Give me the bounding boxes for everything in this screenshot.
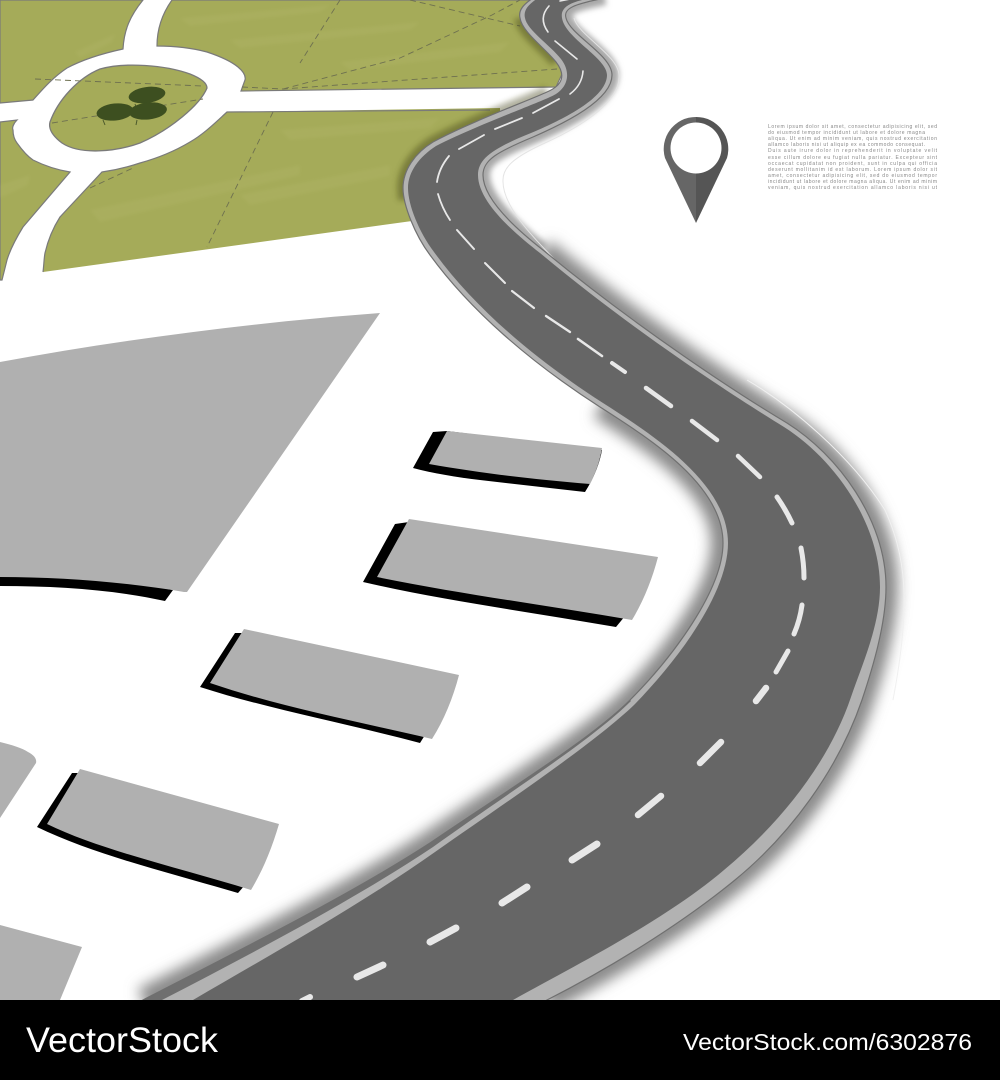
trees — [96, 85, 168, 125]
road centre dashes — [302, 0, 804, 1001]
field: south-west — [0, 120, 70, 280]
icon: map pin — [664, 117, 728, 223]
field texture streaks — [0, 5, 510, 222]
road shadows — [143, 0, 904, 1000]
footer url: VectorStock.com/6302876 — [683, 1029, 972, 1055]
text block: lorem ipsum: Lorem ipsum dolor sit amet, consectetur adipisicing elit, sed — [768, 124, 937, 130]
text block: lorem ipsum — [768, 124, 938, 191]
road dark edge strip — [143, 700, 631, 1000]
road — [110, 0, 886, 1020]
text block: lorem ipsum: veniam, quis nostrud exercitation allamco laboris nisi ut — [768, 185, 938, 191]
card: step 1 — [413, 431, 602, 492]
card: step 4 — [37, 769, 279, 893]
card: left partial — [0, 742, 36, 818]
dashed map lines — [35, 0, 557, 247]
roundabout island — [50, 65, 207, 151]
asphalt — [160, 0, 880, 1018]
text block: lorem ipsum: allamco laboris nisi ut aliquip ex ea commodo consequat. — [768, 142, 925, 148]
card: step 3 — [200, 629, 459, 743]
field: north-west — [0, 0, 143, 103]
text block: lorem ipsum: incididunt ut labore et dolore magna aliqua. Ut enim ad minim — [768, 179, 937, 185]
text block: lorem ipsum: deserunt mollitanim id est laborum. Lorem ipsum dolor sit — [768, 167, 938, 173]
card: large top panel — [0, 313, 380, 601]
text block: lorem ipsum: esse cillum dolore eu fugiat nulla pariatur. Excepteur sint — [768, 155, 938, 161]
text block: lorem ipsum: amet, consectetur adipisicing elit, sed do eiusmod tempor — [768, 173, 937, 179]
card: step 2 — [363, 519, 658, 627]
road shoulder — [110, 0, 886, 1020]
text block: lorem ipsum: Duis aute irure dolor in reprehenderit in voluptate velit — [768, 148, 938, 154]
card: bottom partial — [0, 925, 82, 1000]
text block: lorem ipsum: do eiusmod tempor incididunt ut labore et dolore magna — [768, 130, 925, 136]
footer brand: VectorStock — [26, 1021, 219, 1060]
map: green fields and white roundabout — [0, 0, 563, 280]
text block: lorem ipsum: aliqua. Ut enim ad minim veniam, quis nostrud exercitation — [768, 136, 937, 142]
shadow halo line upper — [503, 18, 619, 270]
field: north-east — [157, 0, 563, 91]
shadow halo line lower — [747, 380, 904, 700]
field: south-east — [43, 108, 500, 272]
field south-east road edge — [43, 110, 490, 272]
footer bar — [0, 1000, 1000, 1080]
text block: lorem ipsum: occaecat cupidatat non proident, sunt in culpa qui officia — [768, 161, 937, 167]
